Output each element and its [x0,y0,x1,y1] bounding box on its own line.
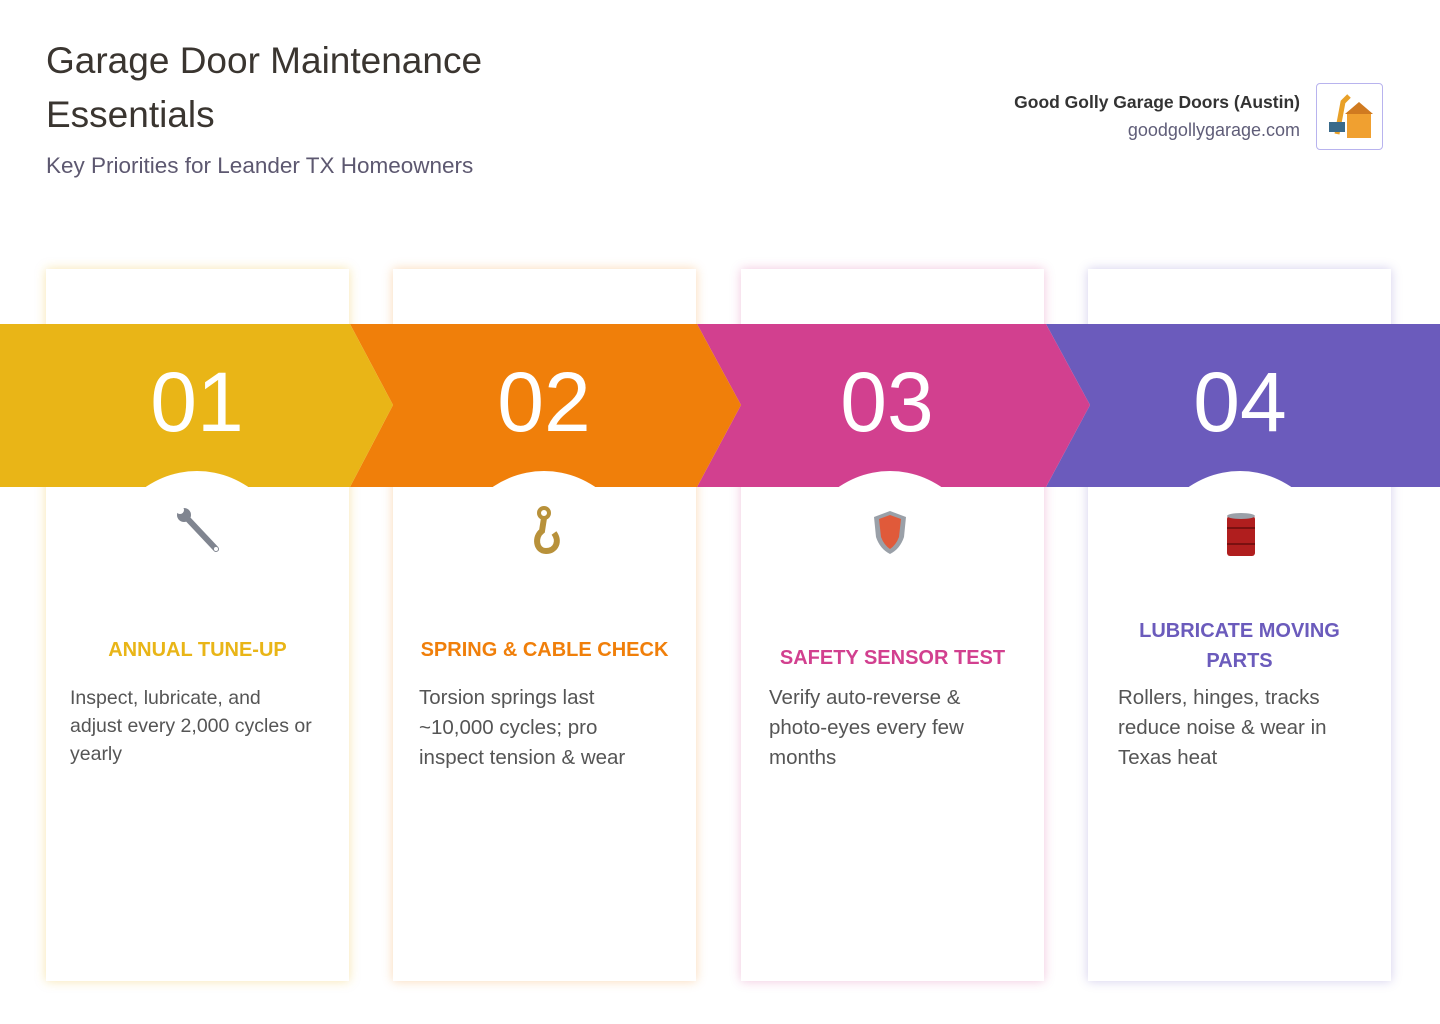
brand name: Good Golly Garage Doors (Austin) [1014,92,1300,112]
circle 3 [838,471,942,487]
icon: shield [874,511,906,554]
card 1 text [70,687,312,765]
card 2 text: ~10,000 cycles; pro [419,716,597,739]
number 03: 03 [840,355,934,449]
card 1 text: yearly [70,743,122,765]
icon: hook [534,506,560,554]
card 3 heading: SAFETY SENSOR TEST [780,647,1005,669]
card 4 heading: PARTS [1206,650,1273,672]
card 4 text: Texas heat [1118,746,1217,769]
logo [1316,83,1383,150]
card 4 heading: LUBRICATE MOVING [1139,620,1340,642]
card 2 heading: SPRING & CABLE CHECK [421,639,668,661]
number 04: 04 [1193,355,1287,449]
card 2 [393,269,696,981]
card 3 text: months [769,746,836,769]
card 4 text: reduce noise & wear in [1118,716,1327,739]
card 3 [741,269,1044,981]
number 02: 02 [497,355,591,449]
card 4 [1088,269,1391,981]
card 3 text [769,686,964,769]
brand url: goodgollygarage.com [1128,120,1300,140]
card 2 text: Torsion springs last [419,686,594,709]
card 1 text: Inspect, lubricate, and [70,687,261,709]
card 1 text: adjust every 2,000 cycles or [70,715,312,737]
number 01: 01 [150,355,244,449]
chevron banner [0,324,1440,487]
card 2 text: inspect tension & wear [419,746,625,769]
card 1 [46,269,349,981]
icon: oil barrel [1227,513,1255,556]
card 3 text: Verify auto-reverse & [769,686,960,709]
circle 4 [1188,471,1292,487]
subtitle: Key Priorities for Leander TX Homeowners [46,153,473,178]
circle 1 [146,471,248,487]
title: Essentials [46,94,215,135]
circle 2 [492,471,596,487]
icon: wrench [177,508,219,552]
card 4 heading [1139,620,1340,672]
card 3 text: photo-eyes every few [769,716,964,739]
card 1 heading: ANNUAL TUNE-UP [108,639,287,661]
card 4 text [1118,686,1327,769]
brand block [1014,83,1383,150]
title: Garage Door Maintenance [46,40,482,81]
card 2 text [419,686,625,769]
card 4 text: Rollers, hinges, tracks [1118,686,1320,709]
title [46,40,482,135]
